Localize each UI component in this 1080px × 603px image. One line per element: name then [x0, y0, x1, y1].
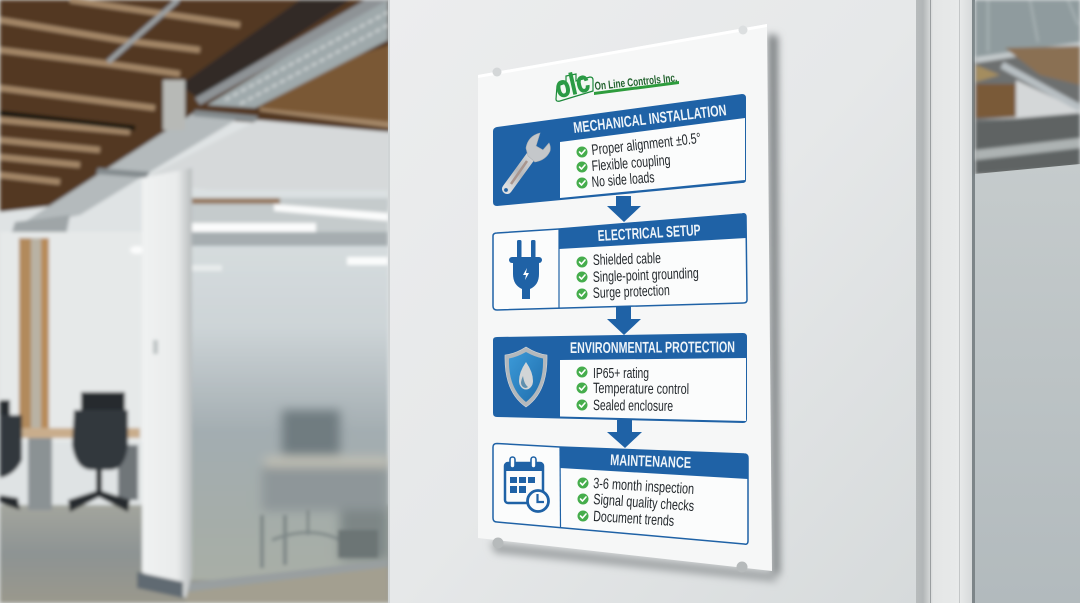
logo: olc — [552, 65, 593, 105]
frosted monitor and desk — [262, 410, 390, 560]
list: environmental checks: Sealed enclosure — [593, 397, 673, 415]
logo — [552, 65, 679, 105]
wood columns — [19, 238, 31, 428]
column — [137, 168, 192, 598]
heading: maintenance: MAINTENANCE — [610, 452, 691, 472]
icon: electric plug — [509, 240, 542, 299]
icon: shield with water drop — [505, 347, 547, 407]
right: door frame — [916, 0, 974, 603]
right: glass door view — [975, 0, 1080, 175]
list: environmental checks — [576, 365, 689, 415]
list: electrical checks — [576, 250, 699, 302]
cable tray — [12, 0, 388, 235]
standoff: top left — [492, 68, 502, 76]
standoff: top right — [738, 26, 748, 34]
panel: mechanical installation — [493, 94, 746, 206]
standoff: bottom right — [736, 562, 748, 572]
list: electrical checks: Shielded cable — [593, 250, 661, 269]
list: environmental checks: IP65+ rating — [593, 365, 649, 382]
right: frosted glass band — [975, 164, 1080, 603]
panel: maintenance — [493, 444, 748, 544]
office chairs — [0, 392, 130, 512]
glass frame base — [186, 560, 388, 592]
heading: mechanical installation: MECHANICAL INSTALLATION — [572, 102, 727, 137]
ceiling lights — [130, 204, 388, 271]
list: maintenance checks: Document trends — [593, 508, 675, 530]
list: electrical checks: Surge protection — [593, 282, 670, 302]
heading: environmental protection: ENVIRONMENTAL PROTECTION — [570, 339, 735, 357]
panel: environmental protection — [493, 333, 747, 423]
icon: wrench — [504, 133, 550, 192]
glass partition — [190, 190, 388, 580]
sign shadow — [490, 34, 780, 582]
logo: On Line Controls Inc. — [594, 72, 678, 93]
heading: electrical setup: ELECTRICAL SETUP — [597, 222, 701, 245]
wooden ceiling — [0, 0, 390, 212]
icon: calendar with clock — [505, 457, 548, 512]
list: maintenance checks: Signal quality checks — [593, 491, 695, 515]
list: mechanical checks: No side loads — [591, 169, 655, 191]
arrow: environmental to maintenance — [607, 420, 642, 448]
list: mechanical checks — [576, 130, 702, 191]
list: mechanical checks: Proper alignment ±0.5° — [591, 130, 702, 159]
sign board — [478, 24, 772, 572]
wall — [388, 0, 920, 603]
standoff: bottom left — [492, 538, 504, 548]
list: maintenance checks: 3-6 month inspection — [593, 475, 695, 498]
sprinkler pipe — [108, 0, 178, 62]
list: environmental checks: Temperature control — [593, 380, 689, 398]
floor — [0, 505, 390, 603]
list: electrical checks: Single-point grounding — [593, 265, 699, 286]
panel: electrical setup — [493, 213, 747, 310]
arrow: electrical to environmental — [607, 306, 641, 335]
list: mechanical checks: Flexible coupling — [591, 152, 671, 175]
back wall — [0, 232, 142, 442]
left: open office background — [0, 0, 390, 603]
desk — [20, 428, 140, 438]
arrow: mechanical to electrical — [607, 196, 641, 222]
list: maintenance checks — [578, 475, 695, 530]
soffit wall — [150, 120, 390, 208]
